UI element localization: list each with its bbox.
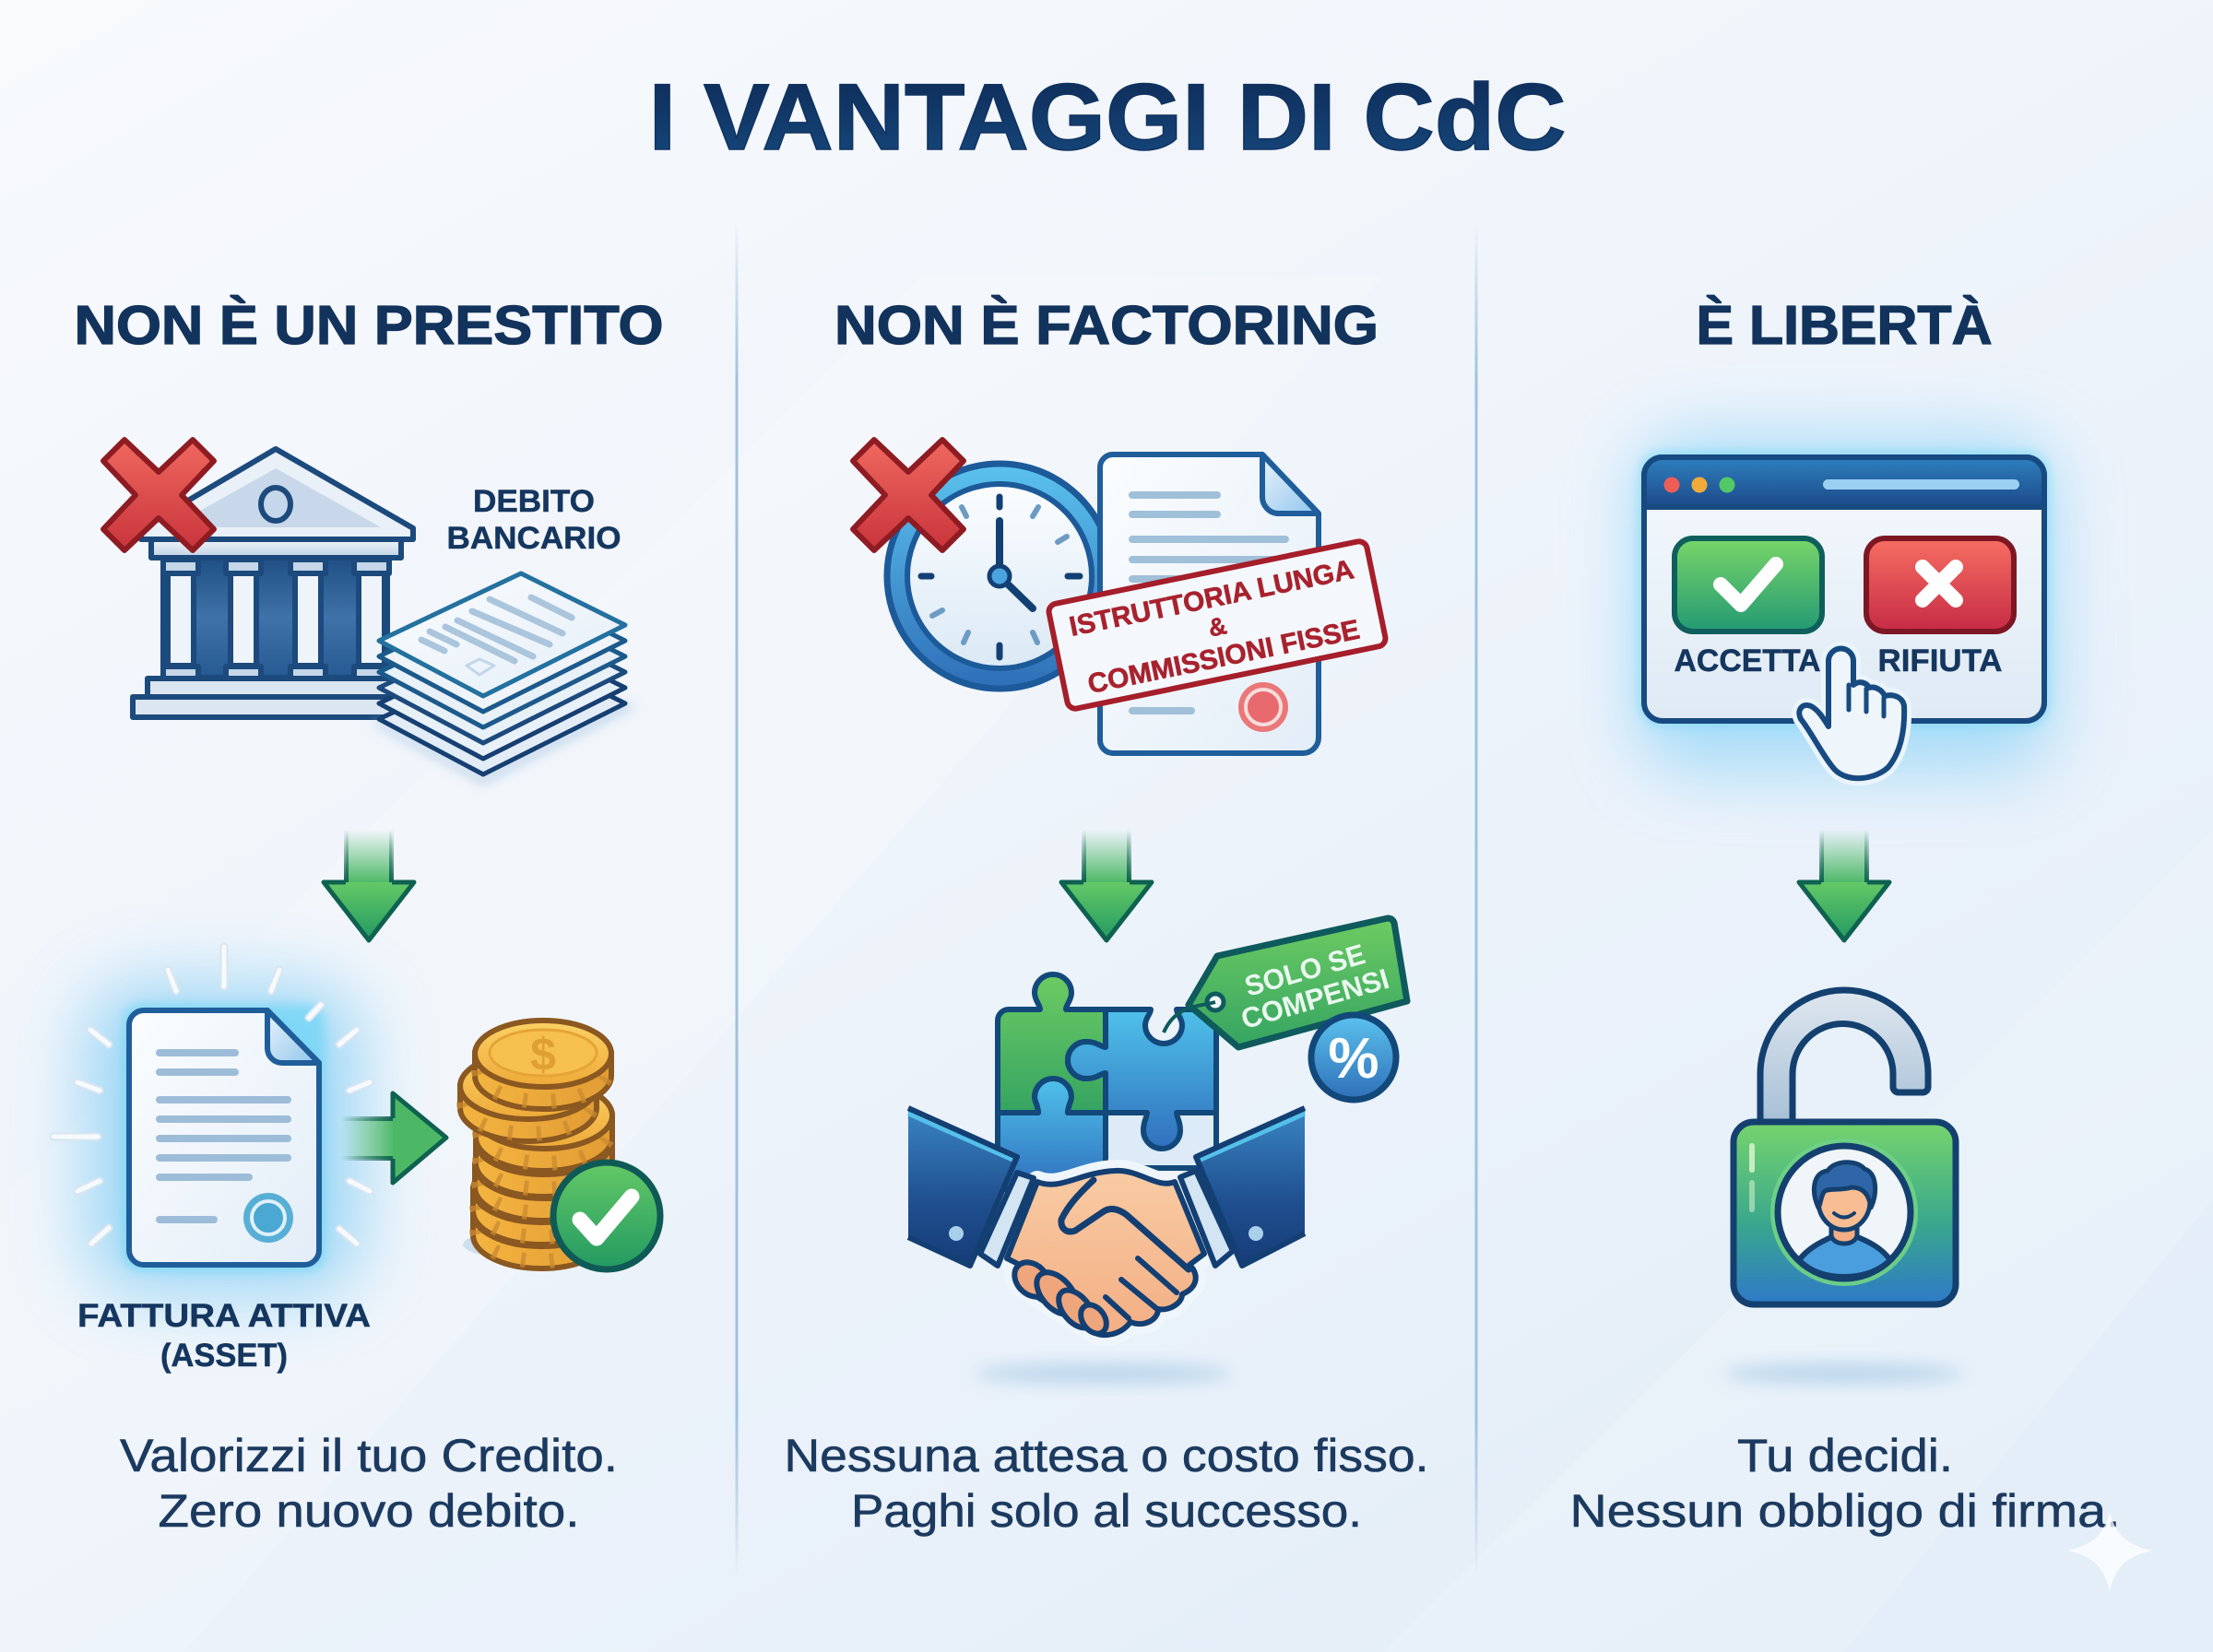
caption: column 1: [120, 1430, 618, 1537]
icon: pointing hand cursor: [1799, 649, 1904, 778]
arrow: down arrow 2: [1061, 830, 1152, 940]
caption: column 3: Nessun obbligo di firma.: [1569, 1485, 2121, 1537]
label: fattura attiva: [77, 1298, 371, 1374]
arrow: down arrow 3: [1799, 830, 1889, 940]
panel: è libertà: [1569, 295, 2121, 1537]
arrow: invoice to coins: [341, 1093, 446, 1183]
caption: column 2: [784, 1430, 1429, 1537]
icon: bank building: [133, 449, 413, 717]
icon: green price tag: SOLO SE: [1241, 938, 1368, 1003]
label: debito bancario: BANCARIO: [446, 521, 621, 556]
caption: column 3: Tu decidi.: [1737, 1430, 1953, 1481]
caption: column 2: Nessuna attesa o costo fisso.: [784, 1430, 1429, 1481]
label: fattura attiva: (ASSET): [160, 1338, 288, 1374]
button: rifiuta: [1866, 538, 2014, 631]
arrow: down arrow 1: [324, 830, 414, 940]
icon: green price tag: [1164, 918, 1407, 1047]
caption: column 2: Paghi solo al successo.: [851, 1485, 1362, 1537]
icon: percent badge: %: [1328, 1027, 1379, 1091]
icon: handshake: [908, 1108, 1305, 1339]
button: accetta: [1675, 538, 1822, 631]
icon: stack of debt papers: [373, 573, 635, 785]
icon: red cross on clock: [853, 440, 964, 550]
icon: percent badge: [1311, 1015, 1396, 1100]
caption: column 1: Valorizzi il tuo Credito.: [120, 1430, 618, 1481]
stamp: istruttoria lunga e commissioni fisse: [1047, 540, 1387, 710]
icon: document: [1100, 454, 1319, 753]
window title bar: [1644, 457, 2044, 507]
icon: open padlock with user: [1734, 990, 1956, 1304]
padlock shackle: [1760, 990, 1928, 1125]
heading: è libertà: È LIBERTÀ: [1697, 295, 1992, 356]
icon: puzzle: [998, 974, 1216, 1189]
icon: green check badge: [553, 1162, 660, 1269]
label: debito bancario: DEBITO: [473, 484, 595, 519]
column dividers: [736, 221, 1477, 1576]
stamp: istruttoria lunga e commissioni fisse: COMMISSIONI FISSE: [1085, 614, 1362, 700]
stamp: istruttoria lunga e commissioni fisse: ISTRUTTORIA LUNGA: [1067, 554, 1356, 643]
caption: column 3: [1569, 1430, 2121, 1537]
icon: glowing invoice: [53, 947, 370, 1296]
icon: red cross on bank: [103, 440, 214, 550]
label: debito bancario: [446, 484, 621, 556]
heading: non è factoring: NON È FACTORING: [834, 295, 1379, 356]
glow behind window: [1637, 438, 2052, 770]
labels: accetta and rifiuta: ACCETTA: [1675, 643, 1820, 678]
labels: accetta and rifiuta: [1675, 643, 2003, 678]
panel: non è factoring: [784, 295, 1429, 1537]
icon: clock: [887, 464, 1112, 689]
shadow under padlock: [1724, 1363, 1964, 1384]
user avatar: [1778, 1146, 1911, 1279]
panel: non è un prestito: [53, 295, 664, 1537]
icon: coin stack: [460, 1021, 625, 1268]
heading: non è un prestito: NON È UN PRESTITO: [74, 295, 664, 356]
label: fattura attiva: FATTURA ATTIVA: [77, 1298, 371, 1334]
labels: accetta and rifiuta: RIFIUTA: [1877, 643, 2003, 678]
padlock body: [1734, 1122, 1956, 1304]
icon: browser window: [1644, 457, 2044, 721]
caption: column 1: Zero nuovo debito.: [159, 1485, 579, 1537]
stamp: istruttoria lunga e commissioni fisse: &: [1206, 611, 1229, 643]
icon: green price tag: COMPENSI: [1237, 962, 1392, 1035]
icon: coin stack: $: [530, 1029, 556, 1080]
title: I VANTAGGI DI CdC: [649, 65, 1566, 170]
shadow under handshake: [975, 1363, 1233, 1384]
icon: watermark sparkle: [2067, 1512, 2152, 1591]
